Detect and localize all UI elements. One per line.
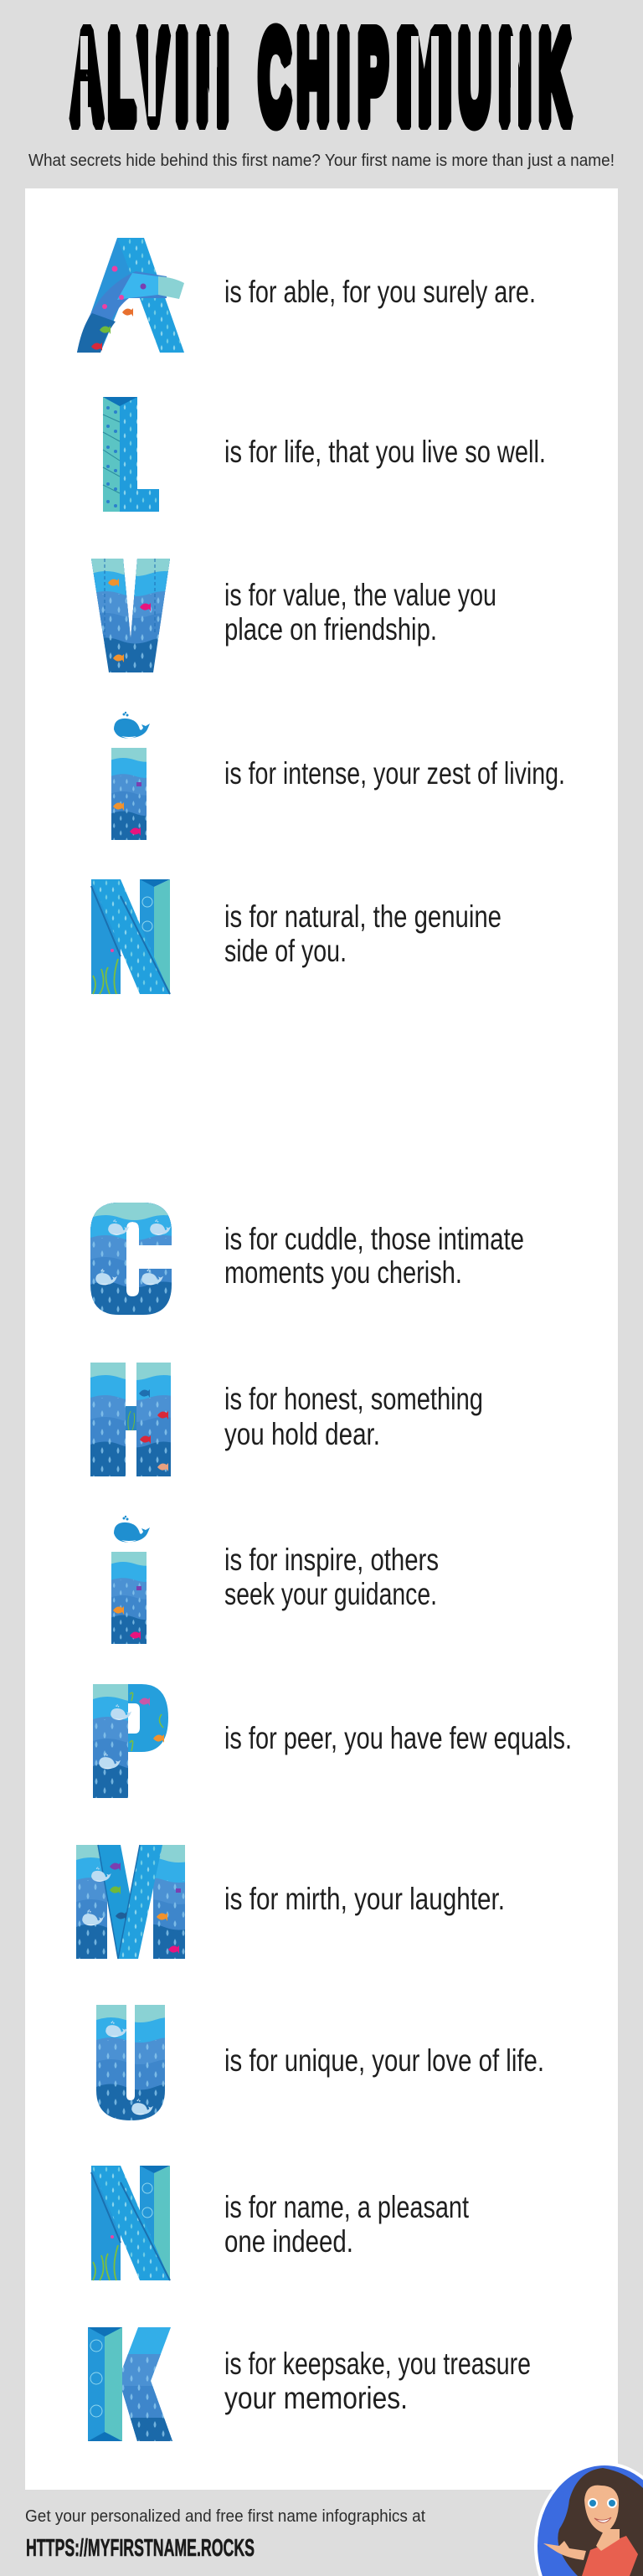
text: moments: moments you cherish. xyxy=(224,1255,462,1290)
text: indeed: one indeed. xyxy=(224,2224,353,2259)
text: unique: is for unique, your love of life. xyxy=(224,2043,544,2078)
icon: letter V xyxy=(91,559,170,672)
title: ALVIN CHIP xyxy=(70,6,388,149)
row: I xyxy=(111,1516,439,1646)
text: name: is for name, a pleasant xyxy=(224,2190,470,2224)
icon: whale dot xyxy=(114,712,150,739)
row: I xyxy=(111,712,565,842)
icon: letter N xyxy=(91,2166,170,2280)
title: M xyxy=(397,6,451,149)
text: value: is for value, the value you xyxy=(224,578,496,612)
text: honest: is for honest, something xyxy=(224,1382,483,1416)
icon: letter I xyxy=(111,748,147,840)
title xyxy=(70,6,571,149)
row: P xyxy=(93,1684,572,1801)
text: life: is for life, that you live so well. xyxy=(224,435,546,469)
icon: letter A xyxy=(77,238,184,353)
icon: letter N xyxy=(91,879,170,994)
icon: letter I xyxy=(111,1552,147,1644)
text: side: side of you. xyxy=(224,934,347,968)
text: mirth: is for mirth, your laughter. xyxy=(224,1882,505,1916)
icon: letter L xyxy=(103,397,159,512)
row: A xyxy=(77,238,536,353)
row: H xyxy=(90,1363,483,1480)
row: V xyxy=(91,559,496,676)
icon: letter C xyxy=(90,1203,172,1315)
row: K xyxy=(88,2327,530,2441)
avatar: cartoon woman in blue circle xyxy=(534,2462,643,2576)
text: you hold dear: you hold dear. xyxy=(224,1417,380,1451)
row: L xyxy=(103,397,546,512)
row: M xyxy=(76,1845,505,1962)
title: UNK xyxy=(459,6,571,149)
row: C xyxy=(90,1203,524,1320)
text: guidance: seek your guidance. xyxy=(224,1577,437,1611)
row: N xyxy=(91,879,502,994)
text: inspire: is for inspire, others xyxy=(224,1543,439,1577)
row: U xyxy=(96,2005,544,2122)
text: keepsake: is for keepsake, you treasure xyxy=(224,2347,531,2381)
icon: letter M xyxy=(76,1845,193,1962)
text: natural: is for natural, the genuine xyxy=(224,899,502,934)
text: memories: your memories. xyxy=(224,2381,408,2415)
footer url: HTTPS://MYFIRSTNAME.ROCKS xyxy=(26,2535,255,2562)
subtitle: What secrets hide behind this first name? Your first name is more than just a name! xyxy=(28,152,615,170)
icon: whale dot xyxy=(114,1516,150,1543)
icon: letter K xyxy=(88,2327,172,2441)
row: N xyxy=(91,2166,470,2280)
text: friendship: place on friendship. xyxy=(224,612,437,647)
footer call to action: Get your personalized and free first name infographics at xyxy=(25,2507,425,2526)
icon: letter P xyxy=(93,1684,168,1798)
text: cuddle: is for cuddle, those intimate xyxy=(224,1222,524,1256)
text: able: is for able, for you surely are. xyxy=(224,275,536,309)
icon: letter U xyxy=(96,2005,165,2120)
icon: letter H xyxy=(90,1363,171,1476)
